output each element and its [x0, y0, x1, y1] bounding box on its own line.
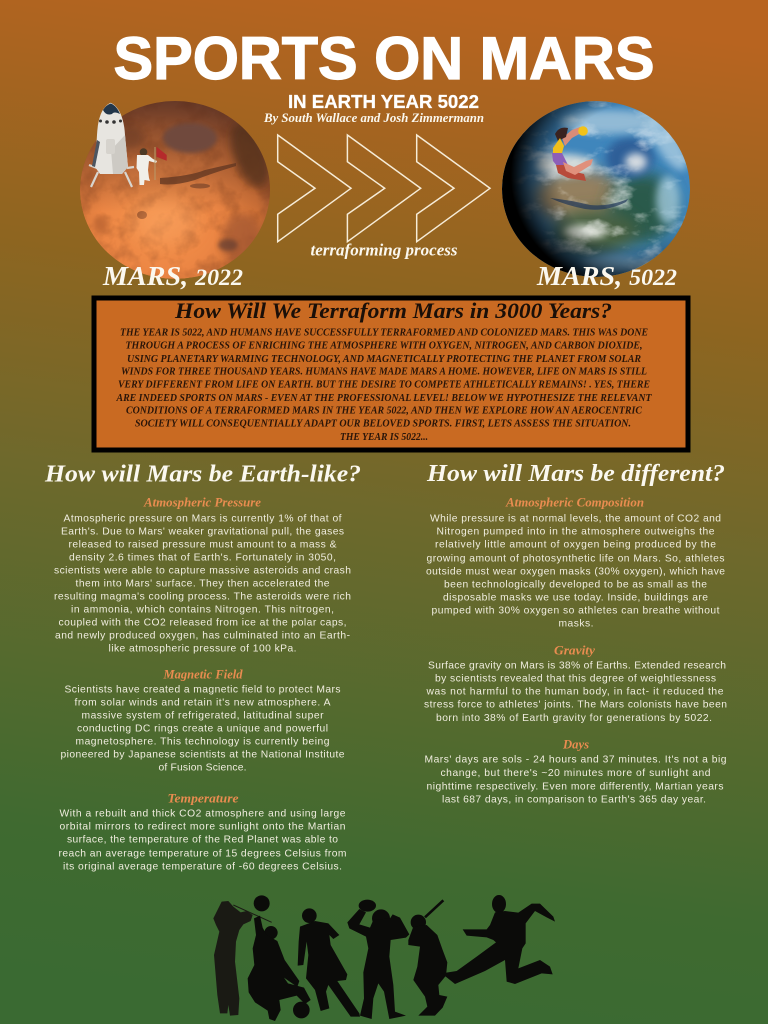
body text: Earth's. Due to Mars' weaker gravitational pull, the gases [61, 526, 344, 538]
planet: terraformed Mars [500, 100, 694, 280]
silhouette: football player [347, 900, 409, 1019]
body text: While pressure is at normal levels, the amount of CO2 and [430, 514, 721, 524]
body text: nighttime respectively. Even more differently, Martian years [426, 782, 724, 792]
body text [426, 514, 725, 630]
icon: rocket [89, 103, 134, 187]
section: gravity [424, 642, 727, 724]
body text: Atmospheric pressure on Mars is currently 1% of that of [64, 514, 342, 524]
body text: With a rebuilt and thick CO2 atmosphere and using large [60, 808, 346, 820]
silhouette: soccer kicker [442, 895, 555, 984]
body text: Surface gravity on Mars is 38% of Earths. Extended research [428, 660, 726, 672]
panel text: CONDITIONS OF A TERRAFORMED MARS IN THE YEAR 5022, AND THEN WE EXPLORE HOW AN AEROCENTRIC [126, 406, 642, 416]
subtitle: IN EARTH YEAR 5022 [288, 91, 479, 112]
section: days [424, 736, 727, 806]
panel text: THROUGH A PROCESS OF ENRICHING THE ATMOSPHERE WITH OXYGEN, NITROGEN, AND CARBON DIOXIDE, [126, 340, 642, 352]
subheading: Days [562, 736, 589, 752]
panel text: VERY DIFFERENT FROM LIFE ON EARTH. BUT THE DESIRE TO COMPETE ATHLETICALLY REMAINS! . YES, THERE [118, 380, 650, 390]
arrows: terraforming process chevrons [278, 135, 490, 242]
heading: how will Mars be different: How will Mars be different? [426, 460, 725, 487]
body text: resulting magma's cooling process. The asteroids were rich [54, 592, 351, 602]
body text [424, 660, 727, 724]
section: atmospheric pressure [54, 494, 351, 654]
body text: like atmospheric pressure of 100 kPa. [108, 644, 296, 654]
body text: them into Mars' surface. They then accelerated the [76, 578, 330, 590]
section: atmospheric composition [426, 494, 725, 630]
body text: orbital mirrors to redirect more sunlight onto the Martian [60, 822, 346, 832]
heading: how will Mars be Earth-like: How will Mars be Earth-like? [44, 460, 361, 488]
section: temperature [58, 790, 346, 872]
panel: how will we terraform Mars [94, 298, 688, 450]
body text: pumped with 30% oxygen so athletes can breathe without [432, 606, 720, 616]
body text: Nitrogen pumped into in the atmosphere outweighs the [436, 526, 715, 538]
section: magnetic field [60, 666, 345, 774]
silhouette: basketball player [248, 895, 311, 1021]
body text: released to raised pressure must amount to a mass & [68, 540, 337, 550]
body text: conducting DC rings create a unique and powerful [77, 724, 328, 734]
subheading: Magnetic Field [163, 666, 243, 682]
body text: by scientists revealed that this degree of weightlessness [435, 674, 716, 684]
label: Mars 5022: MARS, 5022 [536, 261, 677, 291]
body text [60, 684, 345, 774]
label: Mars 2022: MARS, 2022 [102, 261, 243, 291]
body text: from solar winds and retain it's new atmosphere. A [74, 698, 331, 708]
body text: coupled with the CO2 released from ice at the polar caps, [58, 618, 346, 628]
title: SPORTS ON MARS [114, 25, 654, 92]
body text: Mars' days are sols - 24 hours and 37 minutes. It's not a big [424, 754, 727, 766]
body text: was not harmful to the human body, in fact- it reduced the [426, 686, 724, 698]
body text: magnetosphere. This technology is currently being [76, 736, 330, 748]
body text: reach an average temperature of 15 degrees Celsius from [58, 848, 346, 860]
panel text: USING PLANETARY WARMING TECHNOLOGY, AND MAGNETICALLY PROTECTING THE PLANET FROM SOLAR [127, 354, 641, 365]
body text [58, 808, 346, 872]
body text: disposable masks we use today. Inside, buildings are [443, 592, 708, 604]
panel text: SOCIETY WILL CONSEQUENTIALLY ADAPT OUR BELOVED SPORTS. FIRST, LETS ASSESS THE SITUATION. [135, 418, 631, 430]
subheading: Atmospheric Composition [505, 494, 644, 510]
silhouette: runner with ball [298, 908, 360, 1017]
body text: its original average temperature of -60 degrees Celsius. [63, 862, 342, 872]
subheading: Atmospheric Pressure [143, 494, 261, 510]
panel text: THE YEAR IS 5022... [340, 432, 428, 443]
subheading: Gravity [554, 642, 595, 658]
body text: outside must wear oxygen masks (30% oxygen), which have [426, 566, 725, 578]
body text: relatively little amount of oxygen being produced by the [435, 540, 716, 550]
body text: born into 38% of Earth gravity for generations by 5022. [436, 713, 712, 724]
body text: change, but there's ~20 minutes more of sunlight and [440, 768, 711, 779]
body text: been technologically developed to be as small as the [444, 580, 707, 590]
body text: Scientists have created a magnetic field to protect Mars [64, 684, 340, 696]
body text: of Fusion Science. [158, 762, 246, 774]
body text: growing amount of photosynthetic life on Mars. So, athletes [426, 554, 724, 564]
byline: By South Wallace and Josh Zimmermann [263, 111, 484, 125]
panel text: ARE INDEED SPORTS ON MARS - EVEN AT THE PROFESSIONAL LEVEL! BELOW WE HYPOTHESIZE THE RELEVANT [116, 393, 652, 404]
body text: masks. [558, 618, 594, 630]
body text: surface, the temperature of the Red Planet was able to [67, 834, 338, 846]
icon: basketball player [552, 126, 593, 181]
body text: density 2.6 times that of Earth's. Fortunately in 3050, [69, 552, 336, 564]
body text: stress force to athletes' joints. The Mars colonists have been [424, 700, 727, 710]
subheading: Temperature [168, 790, 239, 806]
body text: massive system of refrigerated, latitudinal super [82, 710, 324, 722]
caption: terraforming process: terraforming process [310, 240, 458, 260]
body text: pioneered by Japanese scientists at the National Institute [60, 750, 345, 760]
illustration: Mars 2022 with rocket and astronaut [80, 100, 277, 280]
planet: Mars [80, 100, 277, 280]
panel text [116, 328, 652, 443]
illustration: terraformed Mars 5022 [500, 100, 694, 280]
body text [54, 514, 351, 654]
illustration: athlete silhouettes [213, 895, 555, 1021]
body text: in ammonia, which contains Nitrogen. This nitrogen, [71, 604, 334, 616]
body text [424, 754, 727, 806]
panel text: WINDS FOR THREE THOUSAND YEARS. HUMANS HAVE MADE MARS A HOME. HOWEVER, LIFE ON MARS IS STILL [121, 366, 647, 378]
body text: last 687 days, in comparison to Earth's 365 day year. [442, 794, 706, 806]
icon: astronaut [136, 148, 157, 185]
panel text: THE YEAR IS 5022, AND HUMANS HAVE SUCCESSFULLY TERRAFORMED AND COLONIZED MARS. THIS WAS DONE [120, 328, 648, 338]
panel heading: How Will We Terraform Mars in 3000 Years? [174, 298, 612, 323]
silhouette: golfer [213, 901, 272, 1016]
body text: scientists were able to capture massive asteroids and crash [54, 566, 351, 576]
icon: flag [154, 147, 167, 180]
silhouette: baseball batter [408, 900, 447, 1016]
body text: and newly produced oxygen, has culminated into an Earth- [55, 630, 350, 642]
